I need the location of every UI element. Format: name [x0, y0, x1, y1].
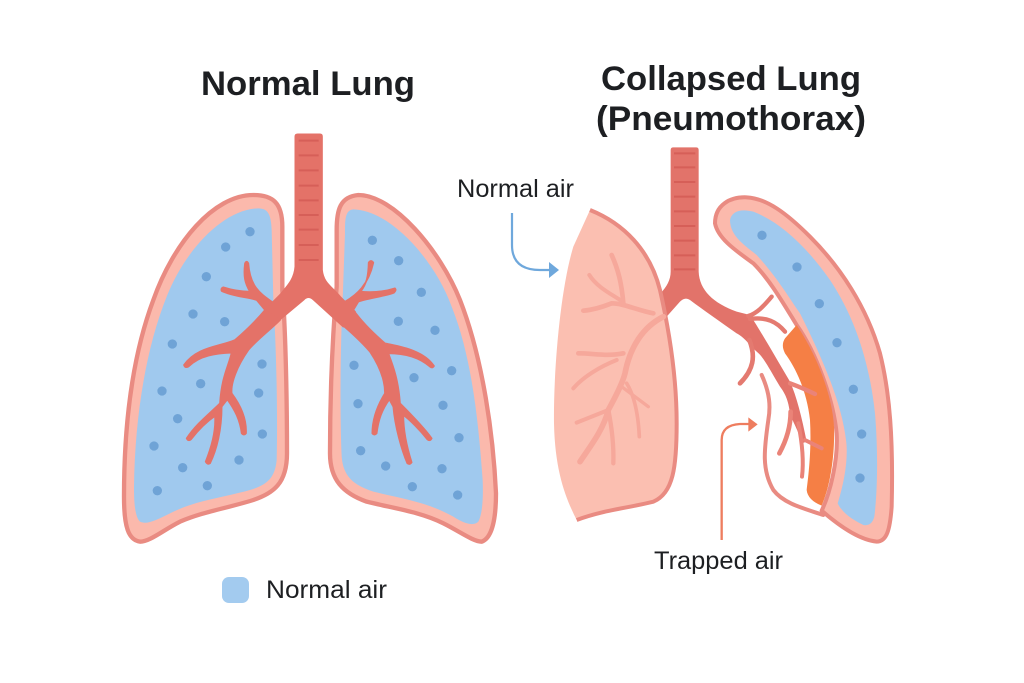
label: trapped air: Trapped air: [654, 547, 783, 575]
right lung of normal diagram: [330, 195, 496, 542]
arrow: normal air: [512, 213, 559, 278]
legend: normal air: Normal air: [266, 576, 387, 604]
orange trapped air band: [783, 325, 834, 506]
air dots in normal lungs: [149, 227, 464, 500]
title: Collapsed Lung (Pneumothorax): [596, 60, 866, 138]
title: Normal Lung: Normal Lung: [201, 65, 415, 103]
diagram: collapsed lung: [554, 147, 892, 542]
air dots in compressed lung: [757, 231, 866, 483]
title: Collapsed Lung (Pneumothorax): (Pneumothorax): [596, 100, 866, 138]
right lung, compressed with air band: [715, 197, 892, 542]
collapsed left lung: [554, 210, 677, 520]
left lung of normal diagram: [124, 195, 287, 542]
label: normal air callout: Normal air: [457, 175, 574, 203]
title: Collapsed Lung (Pneumothorax): Collapsed Lung: [601, 60, 861, 98]
legend: normal air: [222, 576, 387, 604]
diagram: normal lungs: [124, 134, 496, 542]
arrow: trapped air: [722, 417, 758, 540]
trachea and bronchial tree, collapsed side: [661, 147, 822, 477]
trachea and bronchial tree, normal: [184, 134, 434, 464]
